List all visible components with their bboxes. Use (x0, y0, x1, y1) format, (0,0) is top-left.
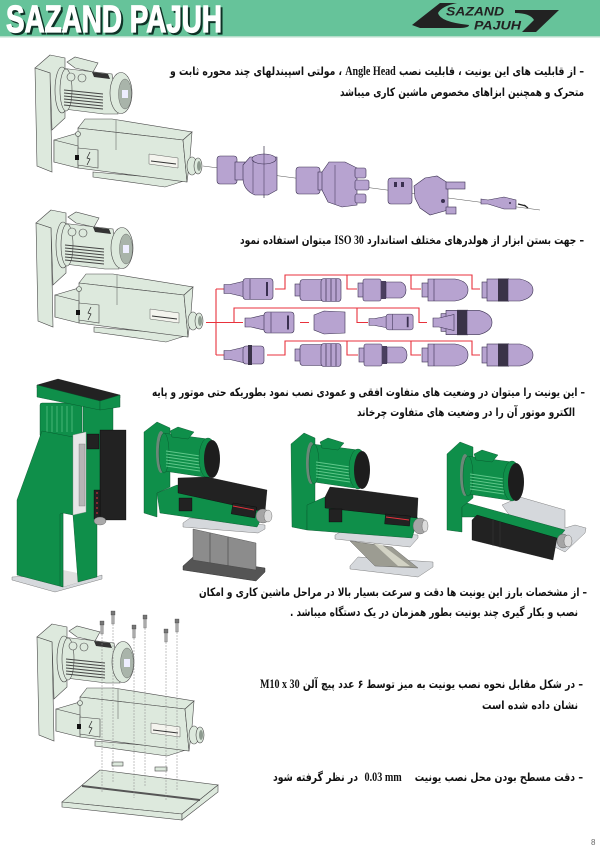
tool holders row 1 (224, 278, 533, 302)
page number: 8 (591, 838, 596, 847)
tool holder (481, 197, 528, 209)
tool holders row 2 (245, 310, 492, 335)
title: SAZAND PAJUH: SAZAND PAJUH (6, 0, 222, 41)
three spindle head (296, 162, 369, 207)
text: key features (199, 585, 587, 620)
horizontal unit on slanted base (291, 433, 433, 577)
horizontal unit on rectangular base (144, 422, 272, 581)
text: mounting orientations (152, 385, 585, 420)
text: mounting bolts (260, 677, 583, 712)
side mounted unit on angle plate (447, 442, 586, 560)
text: capabilities (169, 64, 584, 100)
unit drawing: motor and slide, top (35, 55, 202, 187)
angle head (217, 146, 277, 198)
logo: PAJUH (474, 20, 522, 32)
six screws and guide lines (100, 611, 179, 801)
logo: SAZAND (446, 6, 504, 18)
tool holders row 3 (224, 344, 533, 366)
exploded multi-spindle heads (203, 146, 540, 215)
mounting plate (62, 770, 218, 820)
text: mounting bolts: نشان داده شده است (482, 698, 578, 712)
keys (112, 762, 167, 771)
logo (412, 3, 559, 32)
unit drawing: motor and slide, second (36, 210, 203, 342)
title: SAZAND PAJUH: SAZAND PAJUH (8, 1, 224, 43)
unit drawing with screws (37, 624, 204, 756)
red connector lines (206, 275, 480, 355)
vertical mounted unit (12, 379, 126, 592)
two-way multi spindle head (388, 176, 465, 215)
header bar (0, 0, 600, 43)
